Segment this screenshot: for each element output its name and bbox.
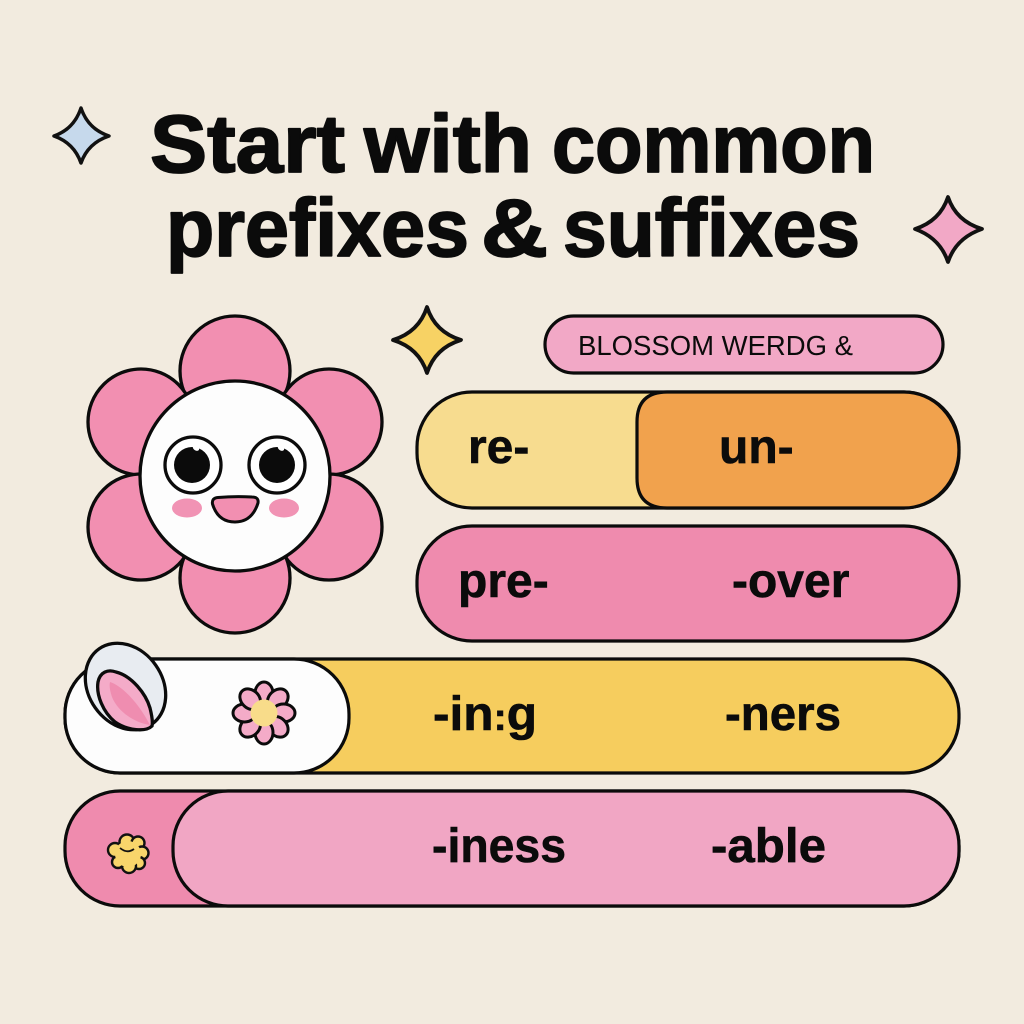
- bar: -iness -able: -able: [711, 820, 826, 873]
- title: common: [552, 99, 875, 190]
- eyes: [165, 437, 305, 493]
- icon: small yellow flower: [108, 834, 148, 873]
- bar: -ing -ners: -ners: [725, 688, 841, 741]
- title: with: [363, 99, 532, 190]
- title: prefixes: [166, 183, 469, 274]
- bar: re- un-: re-: [468, 421, 529, 474]
- icon: petal badge: [69, 628, 182, 745]
- bar: re- un-: [417, 392, 959, 508]
- petals: [88, 316, 382, 633]
- icon: pink sparkle: [915, 197, 982, 262]
- bar: -iness -able: [65, 791, 959, 906]
- icon: blue sparkle: [54, 108, 109, 163]
- label pill: [545, 316, 943, 373]
- icon: small pink flower: [233, 682, 295, 744]
- bar: -ing -ners: -in:g: [433, 688, 537, 741]
- mouth: [212, 497, 258, 522]
- bar: pre- -over: pre-: [458, 555, 549, 608]
- title: Start: [150, 99, 345, 190]
- bar: pre- -over: -over: [732, 555, 849, 608]
- face: [140, 381, 330, 571]
- cheeks: [172, 498, 299, 518]
- bar: re- un-: un-: [719, 421, 794, 474]
- flower mascot: [88, 316, 382, 633]
- bar: -ing -ners: [65, 628, 959, 773]
- icon: yellow sparkle: [393, 307, 461, 373]
- bar: pre- -over: [417, 526, 959, 641]
- title: &: [481, 183, 548, 274]
- title: [150, 99, 875, 274]
- title: suffixes: [563, 183, 860, 274]
- label pill: BLOSSOM WERDG &: [578, 330, 853, 361]
- bar: -iness -able: -iness: [432, 820, 566, 873]
